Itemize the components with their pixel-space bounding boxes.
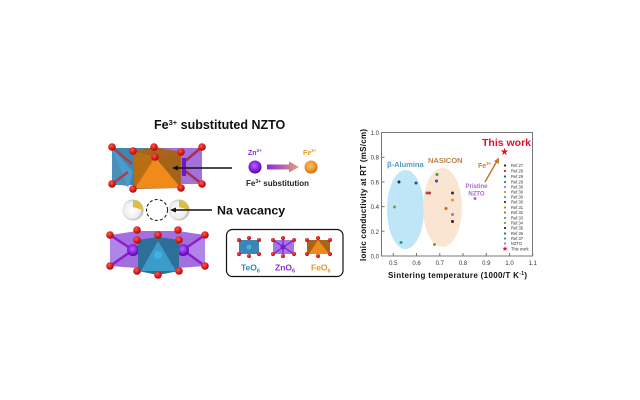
legend: Ref.30: [511, 200, 524, 204]
legend: Ref.30: [511, 190, 524, 194]
scatter chart: [359, 129, 538, 280]
y axis tick labels: 0.2: [371, 230, 380, 236]
axes frame: [382, 132, 533, 256]
label: TeO6: 6: [257, 268, 260, 274]
title: substituted NZTO: [177, 118, 286, 132]
label: Pristine NZTO: NZTO: [468, 192, 485, 198]
y axis tick labels: 1.0: [371, 131, 380, 137]
icon: ZnO6: [271, 236, 296, 258]
arrow: to FeO6: [172, 166, 232, 170]
label: Pristine NZTO: Pristine: [465, 184, 488, 190]
label: beta-Alumina: β-Alumina: [387, 160, 424, 169]
legend: Ref.33: [511, 216, 524, 220]
y axis tick labels: 0.0: [371, 254, 380, 260]
legend: Ref.28: [511, 168, 524, 174]
x axis tick labels: 1.1: [529, 261, 538, 267]
arrow: Na vacancy: [170, 208, 212, 212]
label: ZnO6: ZnO: [275, 262, 292, 272]
legend: Ref.37: [511, 236, 524, 241]
icon: Na atoms with vacancy: [122, 200, 190, 220]
data points: [393, 173, 476, 246]
legend: Ref.29: [511, 174, 524, 179]
label: FeO6: 6: [328, 268, 331, 274]
x axis title: -1: [519, 271, 524, 277]
crystal structure: bottom TeO6 layer: [106, 226, 209, 279]
legend: Ref.30: [511, 184, 524, 190]
Zn to Fe substitution: 2+: [257, 148, 262, 153]
Zn to Fe substitution: substitution: [261, 179, 309, 188]
Zn to Fe substitution: 3+: [311, 148, 317, 153]
label: Fe3+: 3+: [486, 161, 492, 166]
icon: FeO6: [305, 236, 332, 258]
label: TeO6: TeO: [241, 262, 257, 272]
label: This work: This work: [482, 137, 531, 149]
region: beta-alumina ellipse: [387, 170, 424, 249]
title: 3+: [169, 118, 178, 127]
x axis tick labels: 0.5: [389, 261, 398, 267]
icon: TeO6: [237, 236, 261, 258]
legend: ★: [502, 245, 508, 253]
label: NASICON: NASICON: [428, 156, 463, 165]
legend: Ref.27: [511, 163, 524, 168]
label: Na vacancy: Na vacancy: [217, 204, 285, 218]
title: Fe: [154, 118, 169, 132]
x axis tick labels: 0.7: [436, 261, 445, 267]
legend: Ref.29: [511, 180, 524, 184]
y axis title: Ionic conductivity at RT (mS/cm): [359, 129, 368, 261]
legend: Ref.30: [511, 194, 524, 200]
x axis tick labels: [389, 261, 538, 267]
x axis title: Sintering temperature (1000/T K: [388, 271, 519, 280]
legend: Ref.34: [511, 220, 524, 226]
crystal structure: top FeO6 layer: [108, 143, 206, 193]
label: ZnO6: 6: [292, 268, 295, 274]
Zn to Fe substitution: Zn: [248, 150, 257, 157]
y axis tick labels: [371, 131, 380, 260]
arrow: Fe3+ increase: [485, 158, 499, 182]
x axis tick labels: 0.6: [412, 261, 421, 267]
legend box: polyhedra: [226, 230, 343, 276]
Zn to Fe substitution: [246, 148, 318, 188]
label: Fe3+: Fe: [478, 163, 486, 170]
y axis tick labels: 0.6: [371, 180, 380, 186]
x axis title: ): [524, 271, 527, 280]
legend: This work: [511, 246, 529, 252]
legend: Ref.35: [511, 226, 524, 230]
label: FeO6: FeO: [311, 262, 328, 272]
y axis tick labels: 0.4: [371, 205, 380, 211]
legend: NZTO: [511, 241, 522, 246]
legend: Ref.31: [511, 205, 524, 210]
legend: Ref.32: [511, 210, 524, 215]
x axis tick labels: 0.9: [482, 261, 491, 267]
legend: Ref.36: [511, 231, 524, 236]
Zn to Fe substitution: Fe: [303, 150, 311, 157]
x axis tick labels: 1.0: [505, 261, 514, 267]
Zn to Fe substitution: Fe: [246, 179, 255, 188]
Zn to Fe substitution: 3+: [255, 179, 261, 185]
star: This work: ★: [500, 147, 509, 158]
region: NASICON ellipse: [423, 168, 462, 247]
legend: [502, 163, 529, 253]
x axis tick labels: 0.8: [459, 261, 468, 267]
y axis tick labels: 0.8: [371, 156, 380, 162]
